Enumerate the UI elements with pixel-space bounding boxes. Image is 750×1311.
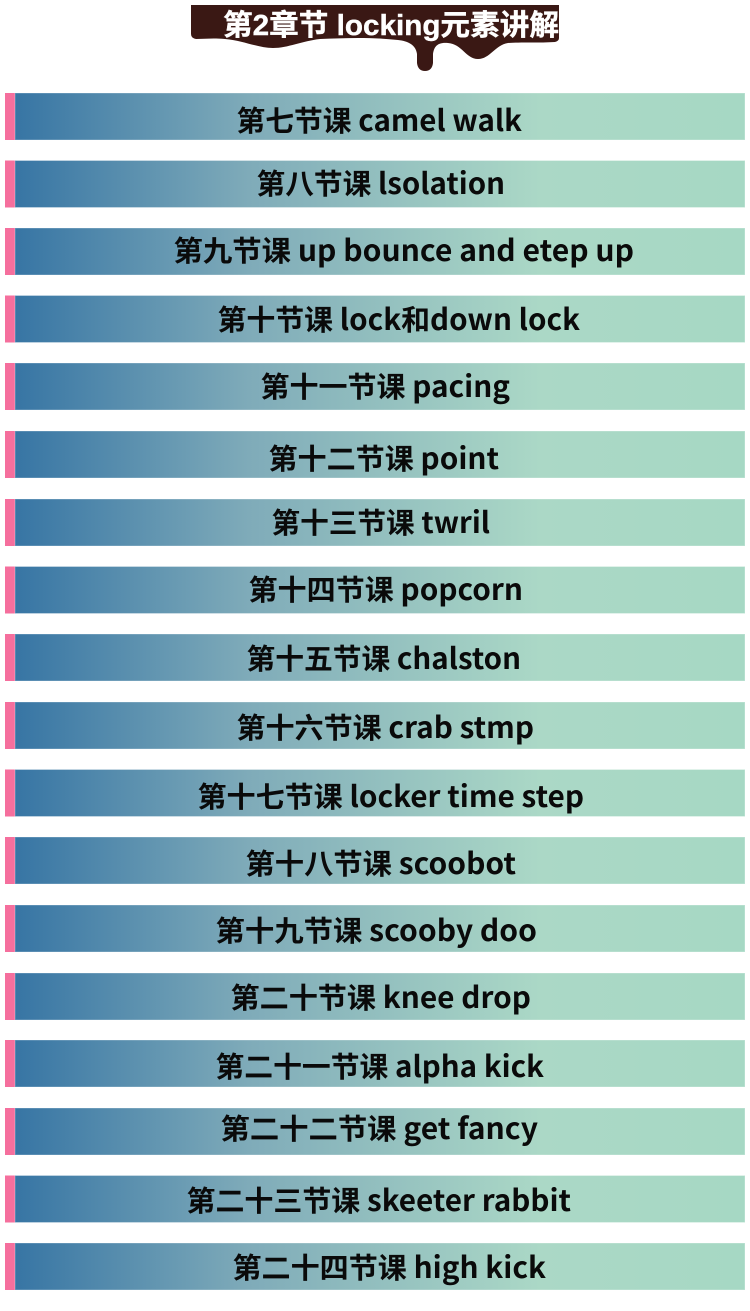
row: lesson 9: 第九节课 up bounce and etep up xyxy=(174,228,634,270)
row: lesson 16 xyxy=(5,702,745,749)
row: lesson 8: 第八节课 lsolation xyxy=(256,161,505,203)
row: lesson 14: 第十四节课 popcorn xyxy=(248,567,523,609)
row: lesson 15 xyxy=(5,634,745,681)
row: lesson 10: 第十节课 lock和down lock xyxy=(218,297,580,339)
row: lesson 12 xyxy=(5,431,745,478)
row: lesson 22: 第二十二节课 get fancy xyxy=(220,1106,538,1148)
row: lesson 22 xyxy=(5,1106,745,1155)
row: lesson 16: 第十六节课 crab stmp xyxy=(236,705,534,747)
row: lesson 7: 第七节课 camel walk xyxy=(236,98,522,140)
row: lesson 21: 第二十一节课 alpha kick xyxy=(216,1044,544,1086)
row: lesson 19 xyxy=(5,905,745,952)
row: lesson 18: 第十八节课 scoobot xyxy=(246,841,516,883)
row: lesson 11: 第十一节课 pacing xyxy=(260,364,511,406)
row: lesson 17 xyxy=(5,770,745,816)
title banner xyxy=(191,5,559,71)
row: lesson 23 xyxy=(5,1176,745,1222)
row: lesson 23: 第二十三节课 skeeter rabbit xyxy=(186,1178,571,1220)
row: lesson 24: 第二十四节课 high kick xyxy=(232,1245,546,1287)
row: lesson 19: 第十九节课 scooby doo xyxy=(216,908,537,950)
title text: 第2章节 locking元素讲解 xyxy=(223,9,559,42)
row: lesson 24 xyxy=(5,1243,745,1290)
row: lesson 20 xyxy=(5,973,745,1020)
chocolate drip shape xyxy=(191,5,559,71)
row: lesson 9 xyxy=(5,228,745,275)
row: lesson 10 xyxy=(5,296,745,342)
row: lesson 8 xyxy=(5,160,745,208)
row: lesson 13 xyxy=(5,499,745,546)
row: lesson 11 xyxy=(5,363,745,410)
row: lesson 18 xyxy=(5,837,745,884)
row: lesson 13: 第十三节课 twril xyxy=(272,500,490,542)
row: lesson 21 xyxy=(5,1040,745,1087)
row: lesson 17: 第十七节课 locker time step xyxy=(198,774,584,816)
row: lesson 20: 第二十节课 knee drop xyxy=(230,975,531,1017)
row: lesson 12: 第十二节课 point xyxy=(268,436,499,478)
row: lesson 15: 第十五节课 chalston xyxy=(246,636,521,678)
row: lesson 7 xyxy=(5,93,745,140)
row: lesson 14 xyxy=(5,566,745,614)
